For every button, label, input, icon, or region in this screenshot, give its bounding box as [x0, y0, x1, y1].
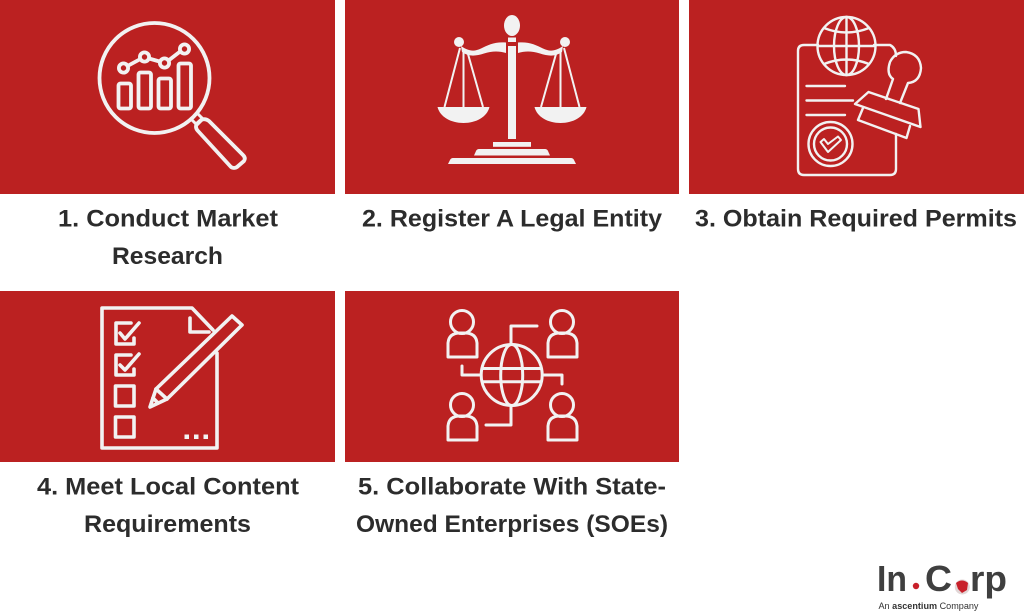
icon: checklist and pencil — [102, 308, 242, 448]
panel: step 4 background — [0, 291, 335, 462]
icon: permit document with globe and stamp — [798, 17, 921, 175]
icon: scales of justice — [438, 15, 586, 164]
logo: InCorp: An ascentium Company — [878, 601, 979, 611]
logo: InCorp: In — [877, 558, 907, 599]
heading: step 5 — [356, 474, 668, 538]
heading: step 3: 3. Obtain Required Permits — [695, 206, 1017, 232]
heading: step 4: 4. Meet Local Content — [37, 474, 299, 500]
heading: step 1: 1. Conduct Market — [58, 206, 278, 232]
heading: step 1: Research — [112, 243, 223, 270]
heading: step 1 — [58, 206, 278, 270]
heading: step 4 — [37, 474, 299, 538]
panel: step 2 background — [345, 0, 679, 194]
icon: magnifying glass over chart — [100, 23, 245, 168]
panel: step 1 background — [0, 0, 335, 194]
heading: step 2: 2. Register A Legal Entity — [362, 206, 662, 232]
panel: step 5 background — [345, 291, 679, 462]
logo: InCorp: C — [925, 558, 952, 599]
heading: step 4: Requirements — [84, 511, 251, 538]
logo: InCorp: rp — [970, 558, 1007, 599]
heading: step 5: 5. Collaborate With State- — [358, 474, 666, 500]
logo: InCorp — [877, 558, 1007, 611]
icon: people connected around globe — [448, 310, 577, 440]
panel: step 3 background — [689, 0, 1024, 194]
heading: step 5: Owned Enterprises (SOEs) — [356, 511, 668, 538]
